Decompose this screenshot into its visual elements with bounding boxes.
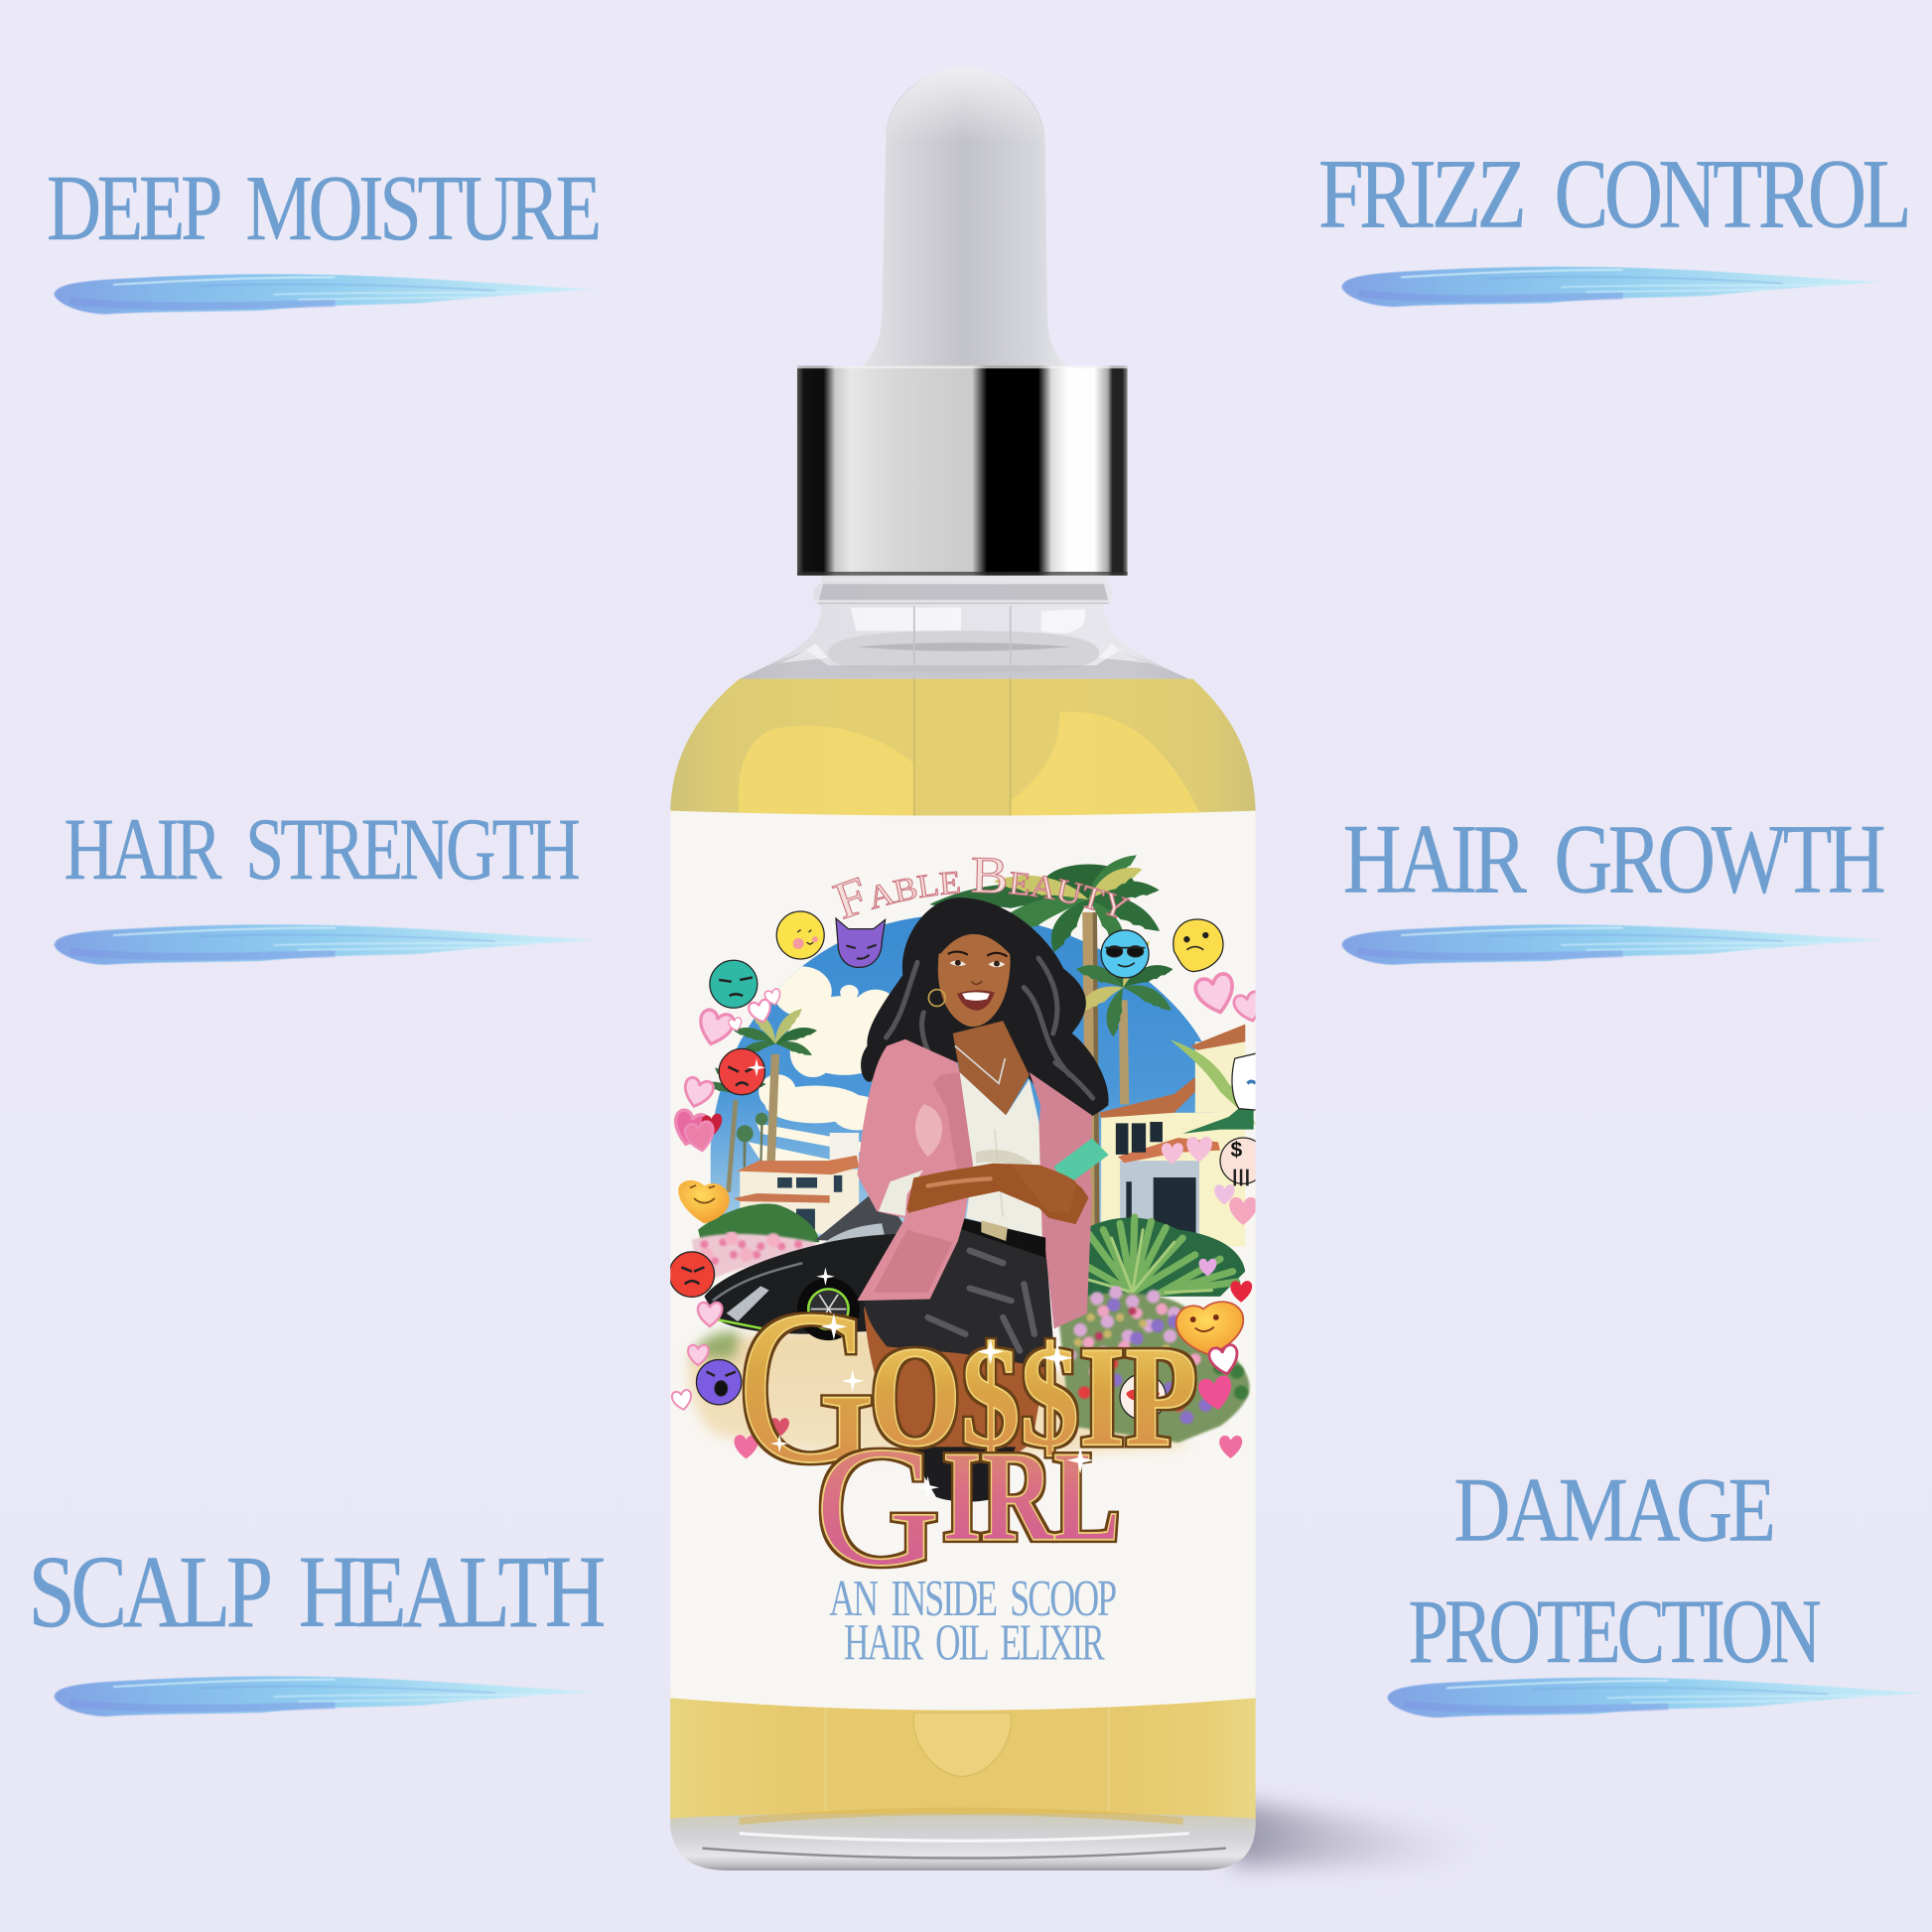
emoji: orange heart smile [678,1180,730,1223]
legs [864,1307,1049,1463]
brush stroke: hair strength [55,924,598,965]
hair back [861,897,1109,1132]
heading: damage protection: PROTECTION [1409,1581,1821,1682]
sky arch [711,914,1214,1238]
house: right [1099,1025,1256,1249]
hand [1012,1165,1076,1213]
heading: damage protection: DAMAGE [1453,1458,1772,1560]
neck and chest [953,1021,1030,1115]
illustration [670,855,1256,1569]
emoji: white crying [1232,1052,1262,1111]
emoji: white heart face behind title [1120,1374,1166,1420]
blazer right [1030,1072,1092,1328]
brush stroke: damage protection [1387,1678,1931,1718]
oil upper [670,679,1256,816]
emoji: purple shocked [696,1359,742,1405]
product name: Gossip: O$$IP [870,1317,1197,1476]
metal collar [797,366,1128,576]
woman [857,897,1109,1502]
arm [906,1164,1089,1224]
skirt [864,1218,1054,1367]
heading: scalp health: SCALP HEALTH [29,1534,604,1649]
glass base [670,1813,1256,1870]
forehead hair [934,903,1014,958]
dropper tube [914,679,1011,816]
emoji: money face [1220,1138,1266,1185]
hair highlights [886,958,1093,1098]
brush stroke: hair growth [1342,924,1885,965]
product name: Girl: G [815,1412,940,1601]
dropper bulb [863,68,1067,366]
house: left [734,1133,859,1234]
sparkles [748,1058,1094,1499]
label tagline: HAIR OIL ELIXIR [844,1615,1105,1672]
palm: tall back [928,852,1163,1259]
oil lower [670,1688,1256,1826]
heading: hair strength: HAIR STRENGTH [65,800,579,898]
emoji: red angry [719,1048,764,1095]
brush stroke: frizz control [1342,267,1885,307]
emoji: teal frown [710,960,758,1008]
nose [972,981,982,984]
shirt [960,1072,1042,1238]
face [938,922,1011,1027]
product name: Girl: IRL [942,1426,1120,1569]
blazer shading [915,1104,942,1157]
boots [906,1447,1016,1502]
floor shadow of bottle [1232,1801,1497,1865]
brush stroke: scalp health [55,1676,598,1717]
product name: Gossip [738,1265,1197,1508]
emoji: worried yellow [1173,919,1223,972]
shirt cuff [879,1170,923,1216]
label tagline: AN INSIDE SCOOP [829,1571,1116,1627]
dropper tip drop [913,1713,1011,1777]
necklace [955,1045,1005,1083]
base highlights [702,1811,1226,1859]
emojis [669,911,1266,1420]
product name: Girl [815,1412,1120,1601]
oil highlights [738,712,1201,816]
label [670,810,1256,1711]
phone [1054,1138,1109,1185]
belt [961,1218,1045,1258]
oil lower bands [826,1707,1109,1811]
ground [689,1330,1191,1456]
left shrubs and flowers [692,1204,819,1278]
clouds [749,967,900,1161]
emoji: cyan sunglasses [1101,930,1149,978]
palm: left [734,1009,817,1162]
emoji: blushing [776,911,824,959]
label tagline [829,1571,1116,1672]
emoji: orange heart right [1176,1302,1243,1354]
right flower bed [1057,1293,1250,1443]
blazer left [857,1039,973,1301]
palm: far left [712,1068,768,1192]
eyes [949,961,1005,967]
smile [957,990,995,1011]
bottle [670,68,1256,1870]
emoji: purple devil [836,918,886,967]
earring [928,990,945,1007]
heading: deep moisture: DEEP MOISTURE [47,157,598,260]
heading: damage protection [1409,1458,1821,1682]
palm: right [1076,938,1173,1104]
emoji: red furious [669,1252,715,1297]
car [704,1192,906,1340]
brush stroke: deep moisture [55,274,598,314]
hearts [670,972,1267,1458]
emoji: money face: $ [1231,1139,1243,1162]
brand arc: Fable Beauty: FABLE BEAUTY [832,858,1131,919]
glass neck and shoulders [740,574,1189,679]
product name: Gossip: G [738,1265,876,1508]
right shrubs and fronds [1070,1217,1245,1297]
